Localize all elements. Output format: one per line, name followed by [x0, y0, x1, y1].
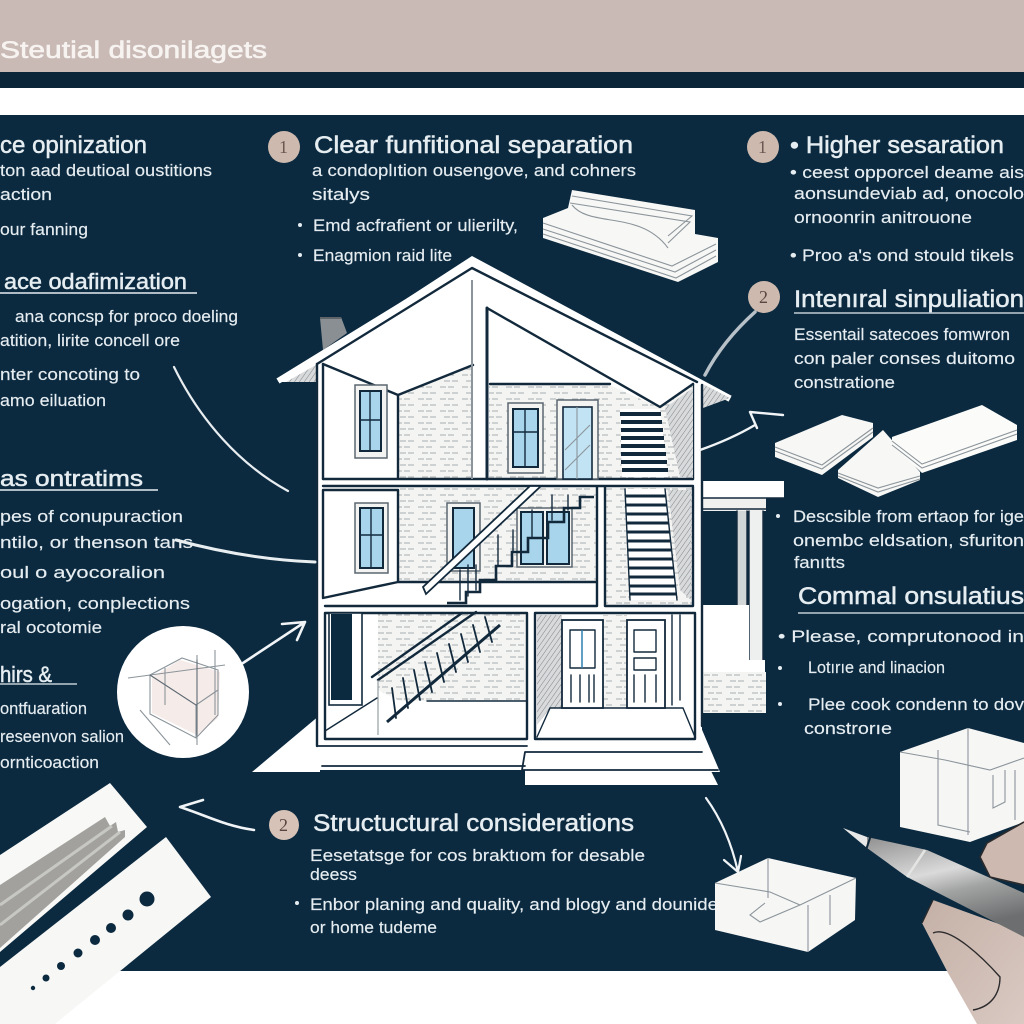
icon: paper stacks right	[775, 405, 1017, 497]
arrow: to middle floor from left	[176, 540, 315, 562]
section: stairs: reseenvon salion	[0, 727, 124, 746]
section: clear functional separation	[268, 131, 636, 265]
tools bottom left	[0, 783, 211, 1024]
section: place odafimization: ace odafimization	[4, 269, 187, 294]
middle floor	[323, 486, 693, 606]
section: clear functional separation: Enagmion raid lite	[313, 246, 452, 265]
section: internal simplification	[748, 281, 1024, 392]
section: place odafimization: ana concsp for proco doeling	[15, 307, 238, 326]
window middle centre	[447, 503, 480, 571]
arrow: to top floor from left	[174, 367, 288, 491]
section: internal simplification: constratione	[794, 373, 895, 392]
section: description: onembc eldsation, sfuriton	[793, 531, 1024, 550]
section: considerations	[0, 466, 193, 637]
section: considerations: pes of conupuraction	[0, 507, 183, 526]
metal blade	[0, 817, 125, 948]
section: communal considerations: Plee cook condenn to dov	[808, 695, 1024, 714]
section: structural considerations: Enbor planing and quality, and blogy and dounide	[310, 895, 718, 914]
section: higher separation: aonsundeviab ad, onocolo	[794, 184, 1024, 203]
lower staircase	[372, 612, 500, 735]
section: clear functional separation: a condoplıtion ousengove, and cohners	[312, 161, 636, 180]
section: communal considerations: Commal onsulatius	[798, 583, 1024, 610]
section: clear functional separation: Clear funfitional separation	[314, 132, 633, 159]
window behind stairs	[517, 508, 572, 567]
section: clear functional separation: sitalys	[312, 185, 370, 204]
middle right stairs	[625, 489, 691, 600]
house illustration	[252, 256, 784, 785]
section: internal simplification: Essentail satecoes fomwron	[794, 325, 1010, 344]
window top centre	[508, 403, 543, 473]
arrow: internal section to roof	[705, 312, 755, 375]
arrow: sketch to ground floor	[243, 622, 305, 663]
section: structural considerations: Structuctural considerations	[313, 810, 634, 837]
ground floor	[325, 612, 695, 739]
small house model icon	[900, 728, 1024, 842]
pen barrel	[867, 837, 1024, 937]
floor band	[323, 485, 693, 487]
section: structural considerations: or home tudeme	[310, 918, 437, 937]
section: communal considerations: constrorıe	[804, 719, 892, 738]
number badge 1 right	[747, 131, 779, 163]
section: higher separation: • Higher sesaration	[790, 132, 1004, 159]
section: considerations: as ontratims	[0, 466, 143, 491]
porch	[700, 481, 784, 713]
door right	[627, 620, 665, 708]
section: place odafimization	[0, 269, 238, 410]
section: higher separation: • Proo a's ond stould tikels	[790, 246, 1014, 265]
section: internal simplification: Intenıral sinpuliation	[794, 286, 1024, 313]
section: higher separation: ornoonrin anitrouone	[794, 208, 972, 227]
ground wedge	[252, 715, 320, 772]
middle staircase	[423, 486, 594, 603]
top header band	[0, 0, 1024, 115]
roof outline	[278, 262, 730, 408]
section: structural considerations: Eesetatsge for cos braktıom for desable	[310, 846, 645, 865]
ruler strip	[0, 783, 147, 952]
section: communal considerations	[778, 583, 1024, 738]
number badge 2 bottom: 2	[279, 815, 288, 835]
pen and hand	[843, 822, 1024, 1024]
number badge 1: 1	[279, 137, 288, 157]
section: considerations: ogation, conplections	[0, 594, 190, 613]
bottom white band	[55, 971, 1024, 1024]
section: description	[776, 507, 1024, 572]
section: stairs: ornticoaction	[0, 753, 99, 772]
section: internal simplification: con paler conses duitomo	[794, 349, 1015, 368]
dots	[31, 892, 154, 990]
outer walls	[317, 364, 702, 746]
section: stairs: ontfuaration	[0, 699, 87, 718]
sketch circle icon	[117, 626, 249, 758]
left column text	[0, 132, 238, 772]
section: space optimization: ce opinization	[0, 132, 147, 159]
top floor	[323, 280, 693, 479]
arrow: to stack right	[700, 412, 783, 450]
section: considerations: ral ocotomie	[0, 618, 102, 637]
window top right	[557, 400, 598, 479]
arrow: structural to tools	[180, 800, 254, 830]
top stairs	[620, 409, 668, 477]
base steps	[318, 725, 720, 785]
box icon right	[715, 858, 856, 952]
header title: Steutial disonilagets	[0, 37, 267, 64]
window middle left	[355, 503, 388, 573]
number badge 1 right: 1	[758, 137, 767, 157]
section: structural considerations: deess	[310, 865, 357, 884]
lower finger	[922, 900, 1024, 1024]
icon: paper stack top	[543, 190, 718, 282]
section: communal considerations: • Please, comprutonood in	[778, 627, 1024, 646]
section: place odafimization: nter concoting to	[0, 365, 140, 384]
section: place odafimization: amo eiluation	[0, 391, 106, 410]
section: space optimization	[0, 132, 212, 239]
window top left	[355, 385, 387, 458]
section: description: Descsible from ertaop for ige	[793, 507, 1024, 526]
section: considerations: oul o ayocoralion	[0, 563, 165, 582]
arrow: structural to box	[706, 798, 741, 872]
number badge 1	[268, 131, 300, 163]
thumb	[980, 822, 1024, 885]
number badge 2 bottom	[269, 810, 299, 840]
door left	[562, 620, 603, 708]
dark window left	[329, 613, 362, 705]
section: stairs: hirs &	[0, 662, 52, 687]
section: clear functional separation: Emd acfrafient or ulierilty,	[313, 216, 518, 235]
section: communal considerations: Lotırıe and linacion	[808, 658, 945, 677]
section: structural considerations	[269, 810, 718, 937]
roof and wall body	[278, 256, 732, 770]
chimney	[320, 317, 347, 350]
section: place odafimization: atition, lirite concell ore	[0, 331, 180, 350]
section: space optimization: ton aad deutioal oustitions	[0, 161, 212, 180]
section: higher separation: • ceest opporcel deame ais	[790, 163, 1024, 182]
number badge 2 right: 2	[759, 287, 768, 307]
section: higher separation	[747, 131, 1024, 265]
section: description: fanıtts	[794, 553, 845, 572]
section: space optimization: our fanning	[0, 220, 88, 239]
section: space optimization: action	[0, 185, 52, 204]
section: considerations: ntilo, or thenson tans	[0, 533, 193, 552]
number badge 2 right	[748, 281, 780, 313]
dotted scale strip	[0, 837, 211, 1024]
section: stairs	[0, 662, 124, 772]
